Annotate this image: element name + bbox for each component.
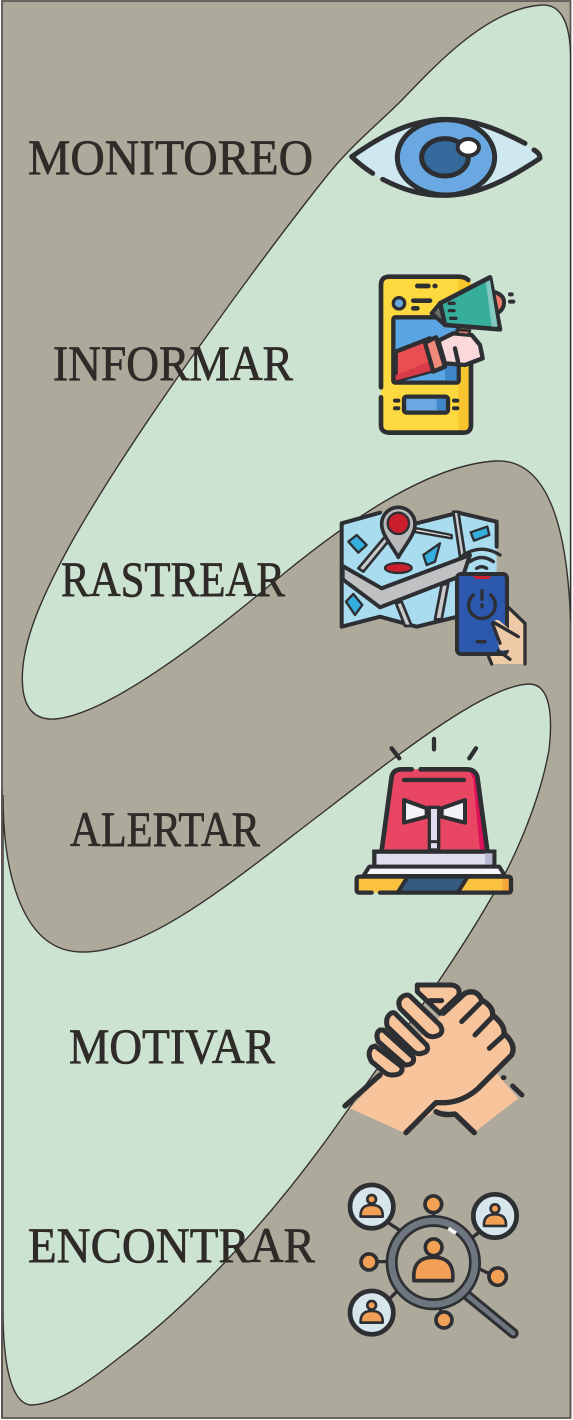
icon: alert siren [357, 739, 511, 893]
panel: upper green wave [22, 5, 571, 719]
heading: ENCONTRAR: ENCONTRAR [28, 1217, 316, 1273]
heading: ALERTAR: ALERTAR [70, 801, 261, 857]
icon: map with phone [342, 507, 525, 664]
icon: magnifier with people network [350, 1185, 517, 1334]
icon: phone with megaphone [381, 277, 513, 433]
icon: clasped hands [345, 985, 522, 1133]
icon: eye [350, 119, 542, 196]
heading: MOTIVAR: MOTIVAR [69, 1018, 276, 1074]
heading: MONITOREO: MONITOREO [28, 129, 313, 185]
panel: lower green wave [3, 684, 551, 1405]
heading: INFORMAR: INFORMAR [53, 335, 294, 391]
right edge line [570, 620, 572, 1418]
left edge line [1, 790, 3, 1418]
heading: RASTREAR: RASTREAR [61, 551, 286, 607]
